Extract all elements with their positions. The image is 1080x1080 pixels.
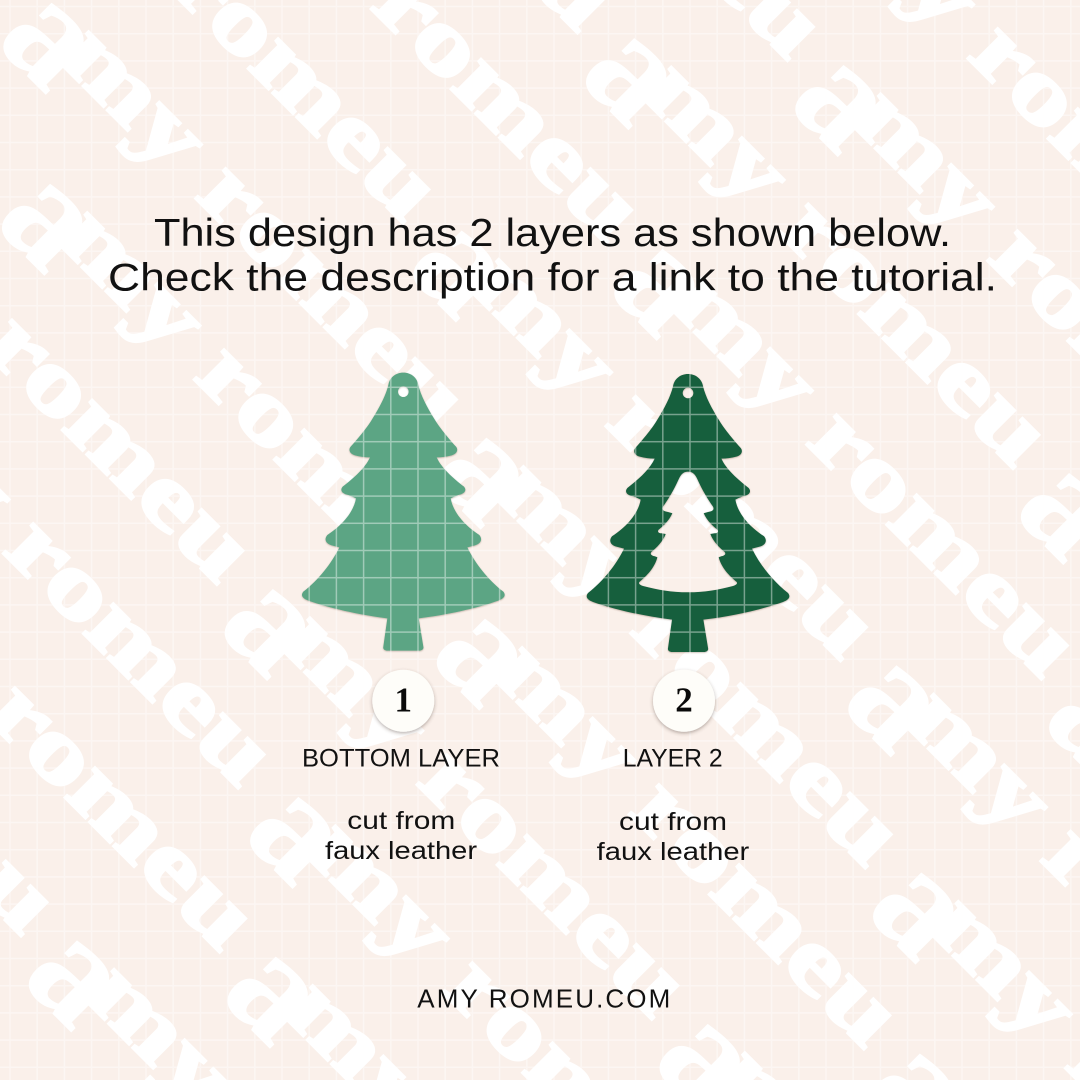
label: bottom layer: faux leather	[325, 837, 477, 865]
watermark pattern: my romeu	[476, 618, 923, 1066]
icon: light green tree ornament, bottom layer	[302, 373, 505, 651]
watermark pattern: my romeu	[42, 3, 489, 450]
watermark pattern: my romeu	[41, 184, 488, 631]
badge: number 2	[653, 670, 715, 732]
label: bottom layer: cut from	[347, 807, 455, 835]
badge: number 2: 2	[675, 681, 693, 720]
watermark pattern: a	[406, 383, 576, 554]
badge: number 1	[372, 670, 434, 732]
title: This design has 2 layers as shown below.	[154, 212, 951, 255]
watermark pattern: my romeu	[452, 230, 900, 677]
watermark pattern: a	[763, 11, 933, 181]
watermark pattern: a	[582, 194, 752, 365]
badge: number 1: 1	[395, 681, 412, 720]
watermark pattern: a	[841, 818, 1011, 989]
watermark pattern: my romeu	[625, 38, 1072, 485]
label: layer 2: faux leather	[597, 838, 749, 866]
label: bottom layer	[302, 745, 500, 865]
label: layer 2: cut from	[619, 808, 727, 836]
watermark pattern: a	[192, 535, 363, 705]
title: Check the description for a link to the tutorial.	[108, 256, 997, 300]
watermark pattern: a	[404, 564, 575, 735]
watermark pattern: a	[195, 902, 366, 1073]
label: layer 2: LAYER 2	[623, 745, 723, 773]
watermark pattern: my romeu	[264, 589, 711, 1036]
watermark pattern: a	[381, 176, 552, 346]
watermark pattern: my romeu	[477, 437, 924, 885]
label: layer 2	[597, 745, 749, 866]
watermark pattern: a	[0, 886, 167, 1056]
icon: dark green tree ornament, layer 2	[587, 374, 789, 652]
watermark pattern: a	[816, 611, 986, 781]
label: bottom layer: BOTTOM LAYER	[302, 745, 500, 773]
footer website: AMY ROMEU.COM	[417, 984, 670, 1014]
watermark pattern: a	[218, 742, 388, 913]
title	[108, 212, 997, 300]
